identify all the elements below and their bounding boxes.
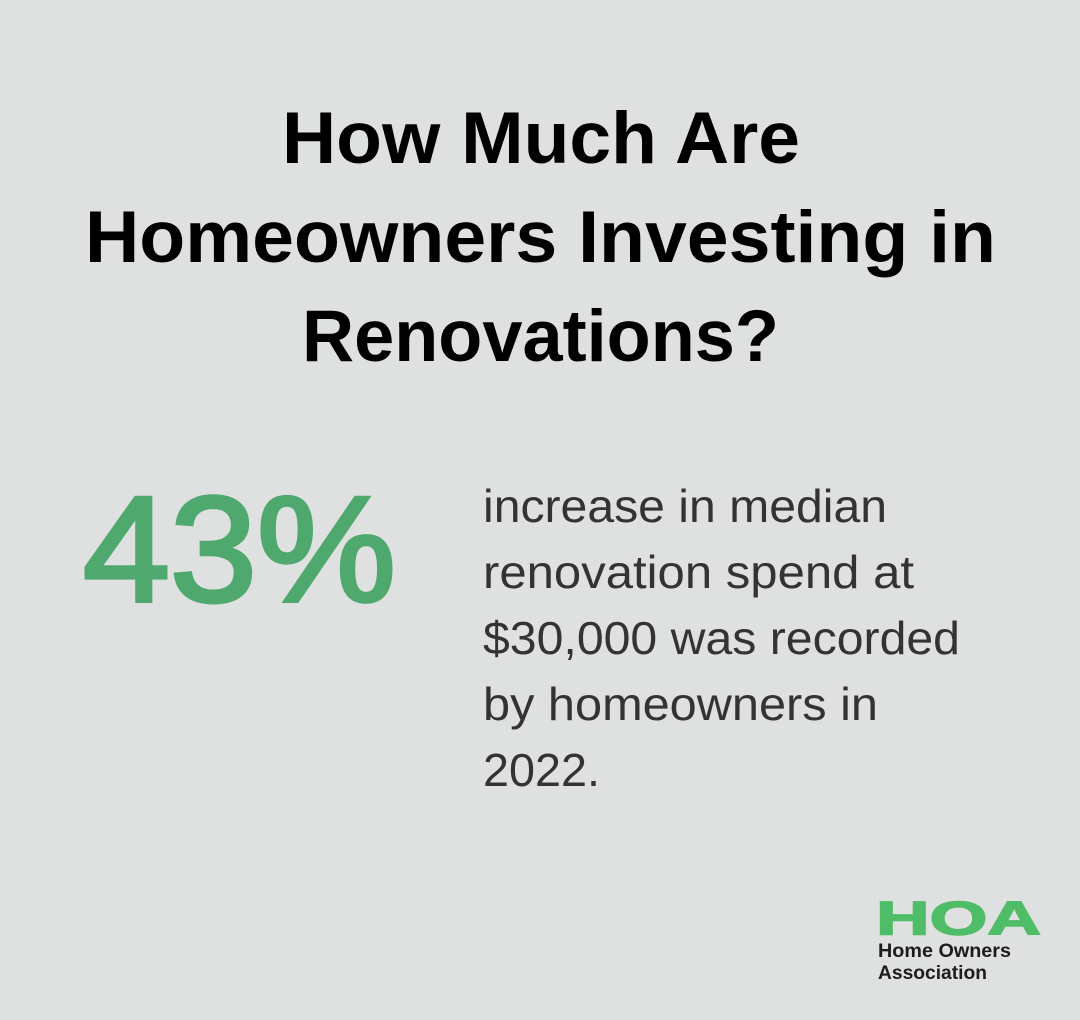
- logo mark: HOA: HOA: [876, 892, 1041, 944]
- statistic: 43%: 43%: [83, 465, 396, 633]
- statistic description: $30,000 was recorded: [483, 612, 960, 664]
- statistic description: 2022.: [483, 744, 600, 796]
- title: Homeowners Investing in: [85, 197, 996, 278]
- title: [85, 98, 996, 377]
- statistic description: increase in median: [483, 480, 887, 532]
- title: Renovations?: [302, 296, 779, 377]
- logo: Home Owners Association: [876, 892, 1041, 984]
- statistic description: [483, 480, 960, 796]
- statistic description: by homeowners in: [483, 678, 878, 730]
- title: How Much Are: [282, 98, 800, 179]
- statistic description: renovation spend at: [483, 546, 914, 598]
- logo wordmark: Home Owners: [878, 941, 1011, 962]
- logo wordmark: [878, 941, 1011, 984]
- logo wordmark: Association: [878, 963, 987, 984]
